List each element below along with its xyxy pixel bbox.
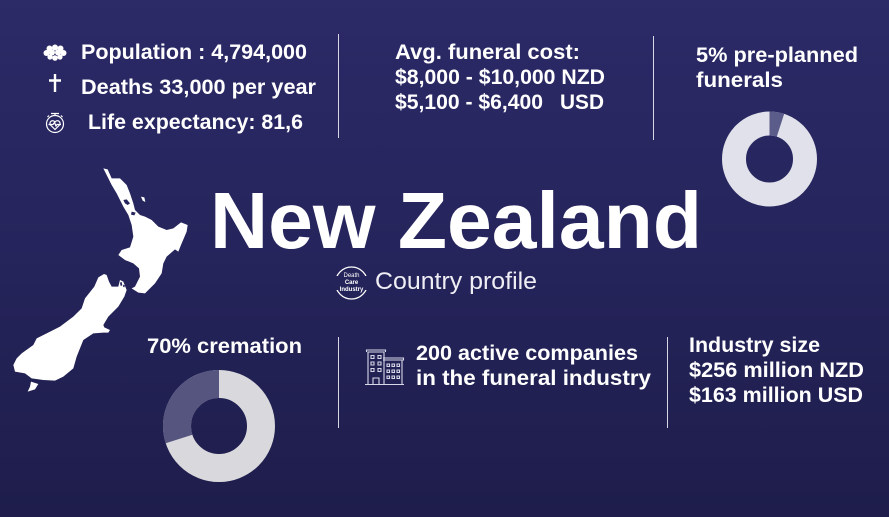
panel: average funeral cost bbox=[395, 41, 605, 114]
panel: average funeral cost: $8,000 - $10,000 NZD bbox=[395, 66, 605, 89]
panel: average funeral cost: Avg. funeral cost: bbox=[395, 41, 580, 64]
North Island bbox=[103, 168, 188, 293]
divider bbox=[338, 34, 340, 138]
icon: Death Care Industry logo bbox=[333, 267, 370, 299]
subtitle: country profile bbox=[333, 267, 537, 299]
map: New Zealand bbox=[13, 168, 188, 392]
panel: pre-planned funerals bbox=[696, 44, 858, 194]
divider bbox=[666, 337, 668, 428]
icon: crowd bbox=[44, 44, 66, 61]
panel: cremation bbox=[147, 335, 302, 468]
population text: Population : 4,794,000 bbox=[81, 41, 307, 64]
panel: active companies: in the funeral industry bbox=[416, 367, 651, 390]
panel: population stats bbox=[44, 41, 316, 134]
deaths text: Deaths 33,000 per year bbox=[81, 76, 316, 99]
panel: industry size bbox=[689, 334, 864, 407]
divider bbox=[652, 36, 654, 140]
panel: pre-planned funerals: funerals bbox=[696, 69, 783, 92]
divider bbox=[338, 337, 340, 428]
icon: Death Care Industry logo: Death bbox=[343, 273, 360, 279]
panel: active companies bbox=[365, 342, 651, 390]
South Island bbox=[13, 274, 127, 381]
life expectancy text: Life expectancy: 81,6 bbox=[88, 111, 303, 134]
icon: stopwatch with heart bbox=[46, 114, 64, 132]
donut chart: 70% cremation bbox=[163, 370, 261, 468]
panel: average funeral cost: $5,100 - $6,400 bbox=[395, 91, 543, 114]
title: New Zealand bbox=[210, 176, 702, 265]
panel: industry size: Industry size bbox=[689, 334, 820, 357]
icon: Death Care Industry logo: Care bbox=[345, 280, 359, 286]
panel: industry size: $163 million USD bbox=[689, 384, 863, 407]
cremation heading: 70% cremation bbox=[147, 335, 302, 358]
icon: Death Care Industry logo: Industry bbox=[340, 287, 364, 293]
panel: industry size: $256 million NZD bbox=[689, 359, 864, 382]
donut chart: 5% pre-planned bbox=[734, 111, 805, 194]
subtitle: country profile: Country profile bbox=[375, 268, 537, 295]
Stewart Island bbox=[28, 382, 38, 392]
icon: buildings bbox=[365, 350, 404, 384]
panel: average funeral cost: USD bbox=[560, 91, 604, 114]
pre-planned heading: 5% pre-planned bbox=[696, 44, 858, 67]
icon: cross bbox=[49, 74, 61, 92]
companies text: 200 active companies bbox=[416, 342, 638, 365]
